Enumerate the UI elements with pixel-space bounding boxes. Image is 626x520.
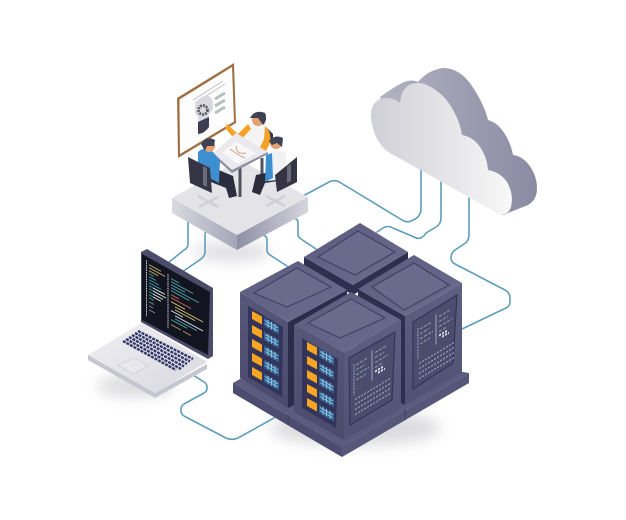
cloud [371, 68, 537, 215]
laptop screen [142, 254, 210, 355]
code text lines [146, 260, 203, 347]
front server rack panel [302, 338, 338, 428]
left chair base [198, 196, 218, 207]
person on the left [188, 138, 237, 207]
gear [198, 106, 208, 114]
front server [294, 292, 401, 440]
connection lines [168, 170, 510, 439]
back server [304, 223, 408, 295]
person on the right [252, 137, 297, 206]
meeting platform [172, 160, 308, 250]
left server [240, 261, 347, 408]
platform right side [237, 197, 308, 250]
whiteboard bars [215, 93, 225, 113]
whiteboard [177, 63, 236, 158]
cloud side [380, 68, 537, 215]
person at the back [225, 112, 273, 157]
platform left side [172, 198, 237, 250]
table paper [222, 142, 256, 164]
cloud face [371, 83, 512, 214]
front server code panel [349, 332, 395, 425]
right chair base [266, 196, 285, 206]
right chair [275, 157, 297, 192]
laptop keyboard [123, 331, 193, 370]
right server panel [413, 295, 457, 389]
platform top [172, 160, 308, 235]
server cluster [233, 223, 469, 457]
laptop [88, 249, 213, 398]
laptop lid [141, 249, 213, 359]
server base [233, 345, 469, 457]
soft ground shadows [97, 242, 440, 446]
right server [358, 255, 462, 405]
database icon [198, 117, 209, 134]
laptop base [88, 355, 207, 398]
left server panel [248, 306, 283, 397]
laptop touchpad [118, 358, 148, 374]
left chair [188, 157, 212, 193]
whiteboard text lines [193, 81, 225, 103]
lightbulb icon [195, 96, 213, 123]
meeting table [213, 133, 268, 197]
